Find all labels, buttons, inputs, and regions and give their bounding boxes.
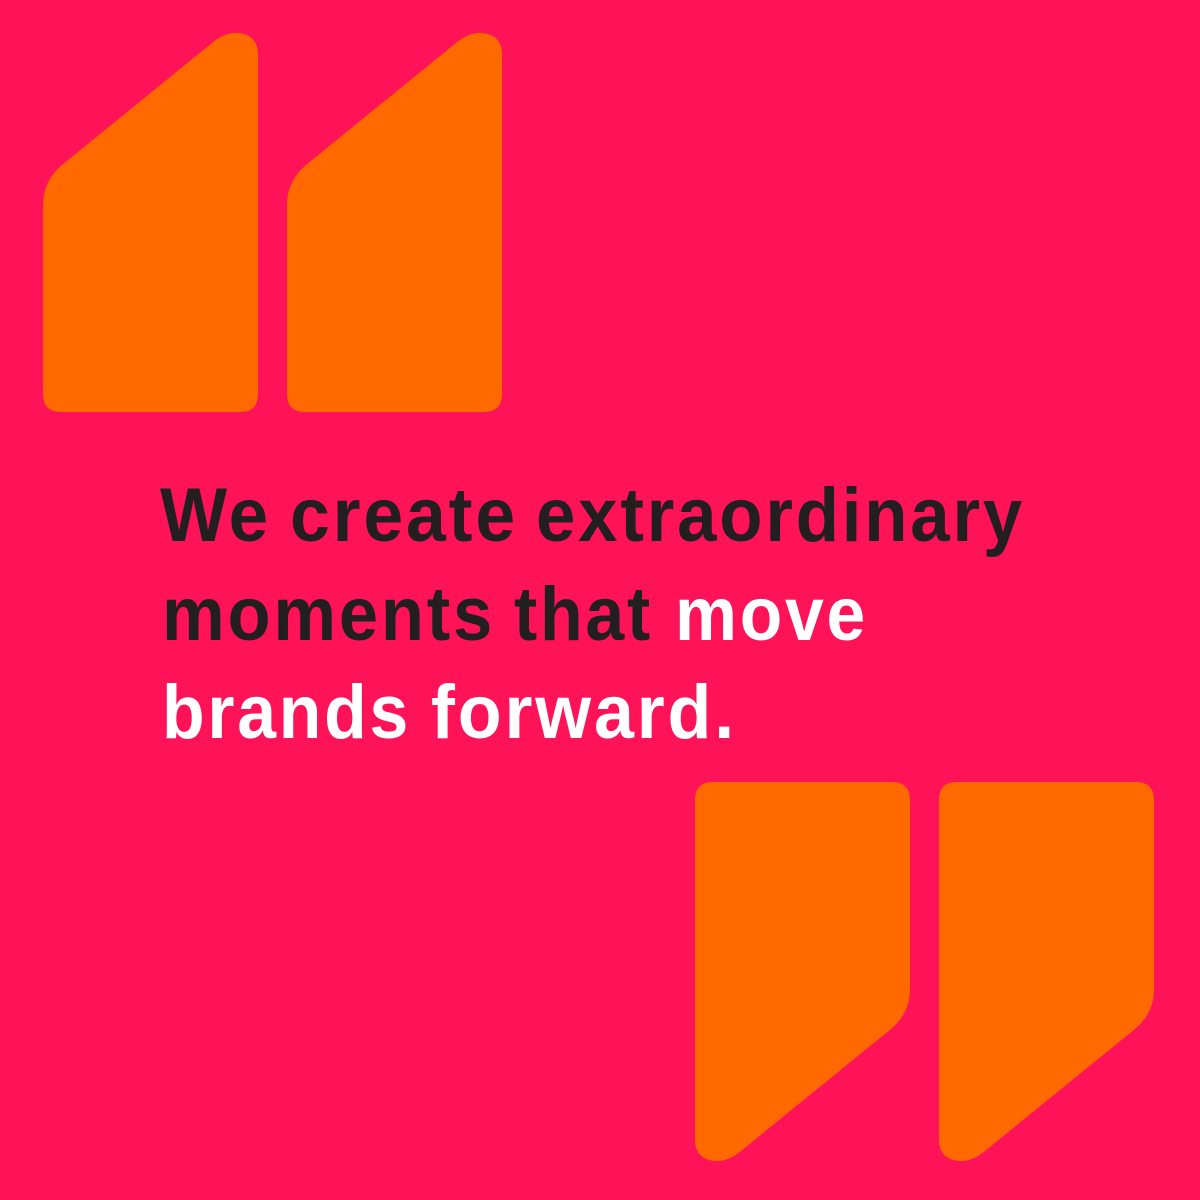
quote text: move	[675, 572, 868, 657]
quote text: moments	[162, 572, 495, 657]
icon: closing quotation mark	[695, 782, 1154, 1161]
quote text: brands	[162, 670, 411, 755]
quote text: forward.	[431, 670, 737, 755]
quote text: We	[160, 473, 271, 558]
icon: opening quotation mark	[43, 33, 502, 412]
quote text	[160, 473, 1025, 755]
quote text: create	[290, 473, 518, 558]
quote text: extraordinary	[536, 473, 1025, 558]
quote text: that	[514, 572, 653, 657]
